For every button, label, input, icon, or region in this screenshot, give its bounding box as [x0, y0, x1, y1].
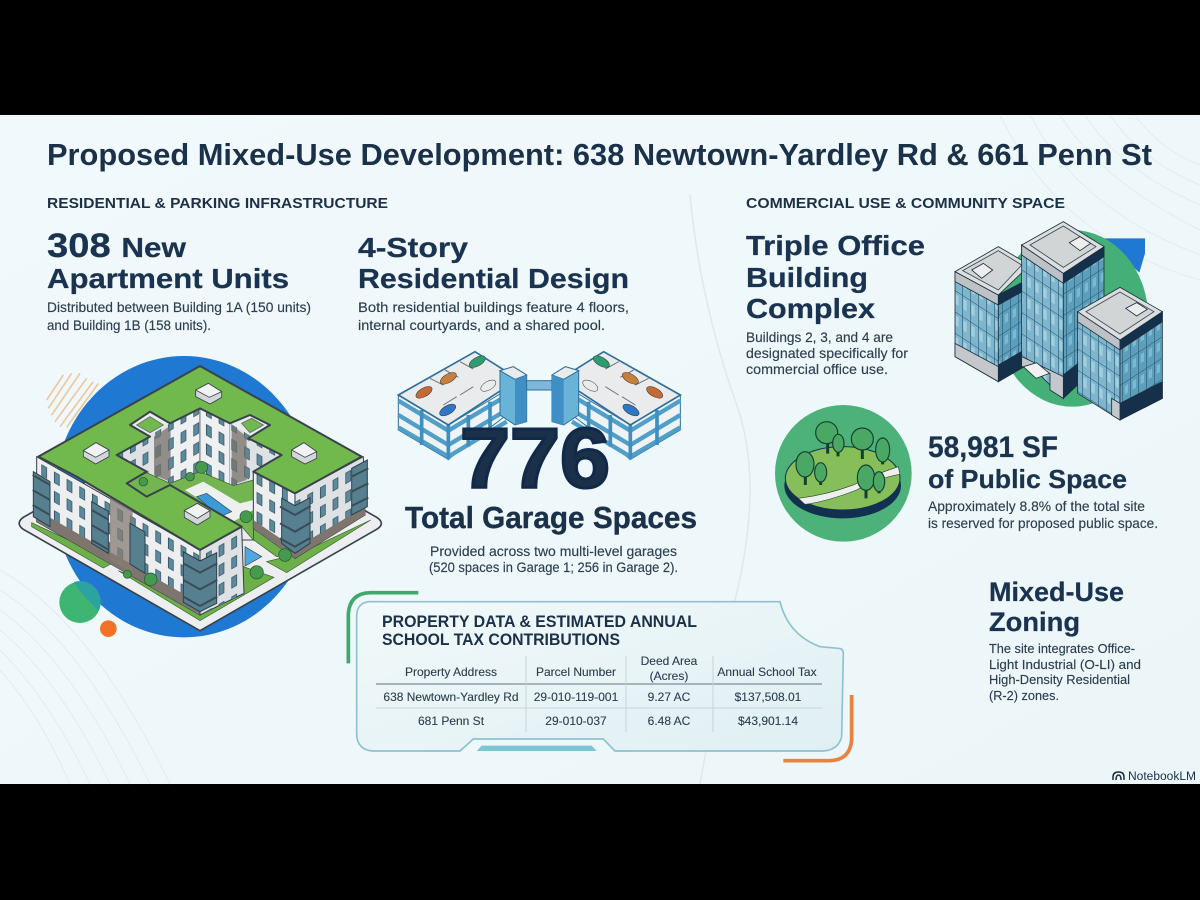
- table text: $137,508.01: [735, 690, 802, 704]
- table text: [383, 654, 817, 728]
- stat: 308 new apartment units: and Building 1B (158 units).: [47, 317, 211, 333]
- table text: 29-010-037: [545, 714, 607, 728]
- table text: 638 Newtown-Yardley Rd: [383, 690, 519, 704]
- left garage: [398, 352, 527, 459]
- table rules: [376, 683, 822, 685]
- green roof: [38, 366, 362, 550]
- section heading: residential: RESIDENTIAL & PARKING INFRASTRUCTURE: [47, 196, 388, 212]
- text: mixed-use zoning: (R-2) zones.: [989, 688, 1059, 703]
- illustration: office towers: [955, 222, 1162, 420]
- stat: public space: 58,981 SF: [928, 431, 1058, 464]
- illustration: parking garages: [398, 352, 680, 459]
- trees: [796, 422, 890, 498]
- site base plate: [19, 417, 381, 631]
- section heading: commercial: COMMERCIAL USE & COMMUNITY SPACE: [746, 196, 1065, 212]
- courtyard backing: [117, 408, 282, 540]
- text: mixed-use zoning: High-Density Residential: [989, 672, 1130, 687]
- panel: property data table: SCHOOL TAX CONTRIBUTIONS: [382, 631, 620, 649]
- right garage: [552, 352, 680, 459]
- stat: 4-story residential design: internal courtyards, and a shared pool.: [358, 317, 605, 333]
- front block balconies: [33, 472, 217, 612]
- right tower: [1078, 287, 1162, 420]
- left tower: [955, 247, 1030, 382]
- table text: (Acres): [650, 669, 688, 683]
- text: mixed-use zoning: Mixed-Use: [989, 577, 1124, 607]
- text: mixed-use zoning: Light Industrial (O-LI) and: [989, 657, 1141, 672]
- stat: 776 total garage spaces: [405, 411, 697, 575]
- courtyard trees: [123, 461, 291, 586]
- text: triple office building complex: Complex: [746, 293, 875, 324]
- title: Proposed Mixed-Use Development: 638 Newtown-Yardley Rd & 661 Penn St: [47, 137, 1152, 172]
- courtyard floor: [127, 472, 253, 540]
- backdrop shapes: [1103, 238, 1145, 273]
- connecting bridge: [527, 381, 553, 390]
- green and orange dots: [59, 581, 117, 637]
- roof access boxes: [83, 383, 317, 525]
- table text: 9.27 AC: [648, 690, 691, 704]
- illustration: public park: [775, 405, 912, 542]
- infographic background: [0, 115, 1200, 784]
- table text: Deed Area: [641, 654, 698, 668]
- panel: property data table: [348, 593, 852, 761]
- stat: 308 new apartment units: Distributed between Building 1A (150 units): [47, 299, 311, 315]
- text: triple office building complex: [746, 230, 925, 377]
- stat: 308 new apartment units: [47, 227, 311, 333]
- illustration: residential complex: [19, 356, 381, 637]
- table text: Property Address: [405, 665, 497, 679]
- table text: 681 Penn St: [418, 714, 485, 728]
- right block walls: [253, 472, 295, 558]
- stat: 308 new apartment units: 308 New: [47, 227, 186, 265]
- NotebookLM watermark: NotebookLM: [1128, 771, 1196, 783]
- text: mixed-use zoning: [989, 577, 1141, 703]
- stat: public space: is reserved for proposed public space.: [928, 515, 1158, 531]
- table text: Parcel Number: [536, 665, 616, 679]
- text: mixed-use zoning: Zoning: [989, 607, 1080, 637]
- table text: 6.48 AC: [648, 714, 691, 728]
- roof terraces: [137, 417, 263, 433]
- table text: $43,901.14: [738, 714, 798, 728]
- stat: 4-story residential design: [358, 232, 629, 333]
- park path: [798, 467, 900, 504]
- right block balconies: [282, 460, 367, 553]
- stat: 776 total garage spaces: (520 spaces in Garage 1; 256 in Garage 2).: [429, 559, 678, 575]
- courtyard paths and pools: [185, 482, 253, 522]
- text: mixed-use zoning: The site integrates Office-: [989, 641, 1135, 656]
- stat: 776 total garage spaces: Provided across two multi-level garages: [430, 543, 677, 559]
- lawn strips: [32, 507, 371, 621]
- stat: public space: of Public Space: [928, 464, 1127, 494]
- courtyard walls: [170, 408, 200, 487]
- stat: 4-story residential design: Both residential buildings feature 4 floors,: [358, 299, 629, 315]
- blue backdrop circle: [54, 356, 314, 637]
- stat: public space: [928, 431, 1158, 531]
- text: triple office building complex: commercial office use.: [746, 361, 888, 377]
- front block walls: [37, 457, 200, 615]
- stat: 776 total garage spaces: 776: [460, 411, 610, 505]
- stat: 776 total garage spaces: Total Garage Spaces: [405, 500, 697, 535]
- stat: 4-story residential design: 4-Story: [358, 232, 468, 263]
- panel heading: PROPERTY DATA & ESTIMATED ANNUAL: [382, 613, 697, 631]
- stat: 308 new apartment units: Apartment Units: [47, 263, 289, 294]
- table text: 29-010-119-001: [534, 690, 619, 704]
- text: triple office building complex: Triple Office: [746, 230, 925, 261]
- text: triple office building complex: designated specifically for: [746, 345, 908, 361]
- stat: 4-story residential design: Residential Design: [358, 263, 629, 294]
- stat: public space: Approximately 8.8% of the total site: [928, 498, 1145, 514]
- text: triple office building complex: Buildings 2, 3, and 4 are: [746, 329, 893, 345]
- background contour lines: [0, 115, 1200, 784]
- hatched orange circle: [47, 373, 98, 427]
- table text: Annual School Tax: [717, 665, 817, 679]
- panel frame: [348, 593, 852, 761]
- centre tower: [1022, 222, 1104, 398]
- text: triple office building complex: Building: [746, 262, 868, 293]
